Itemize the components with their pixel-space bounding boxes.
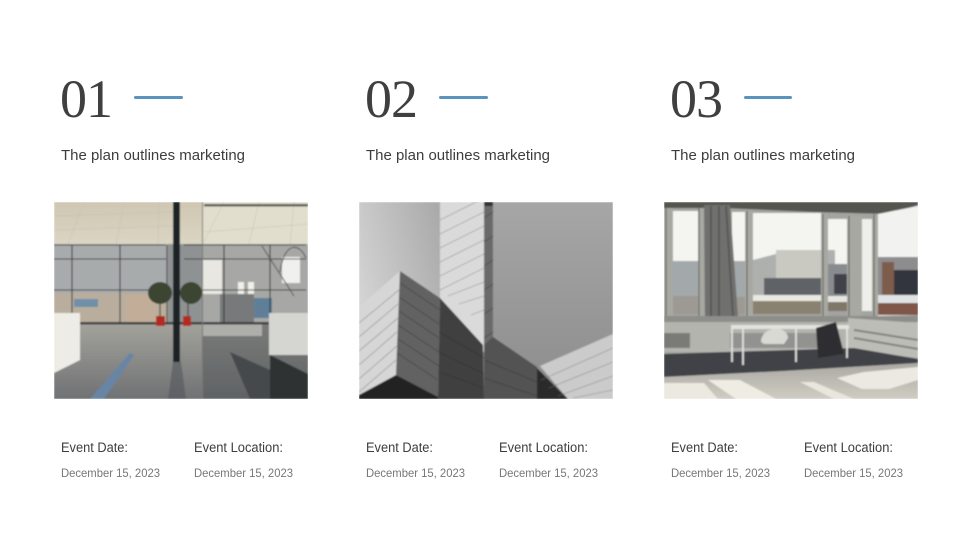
subtitle: The plan outlines marketing	[61, 147, 245, 164]
photo: office interior with glass wall	[54, 202, 308, 399]
event date	[671, 440, 770, 480]
event location	[499, 440, 598, 480]
subtitle: The plan outlines marketing	[671, 147, 855, 164]
event location: December 15, 2023	[804, 466, 903, 480]
number 03: 03	[670, 69, 722, 129]
photo: room with large windows and desk	[664, 202, 918, 399]
accent line	[134, 96, 183, 99]
event date: December 15, 2023	[61, 466, 160, 480]
photo: brick tower architecture	[359, 202, 613, 399]
subtitle: The plan outlines marketing	[366, 147, 550, 164]
accent line	[744, 96, 792, 99]
event location: Event Location:	[194, 440, 283, 455]
number 02: 02	[365, 69, 417, 129]
panel: step 02	[359, 69, 613, 480]
event date	[61, 440, 160, 480]
event location: December 15, 2023	[499, 466, 598, 480]
event date: December 15, 2023	[366, 466, 465, 480]
event location: Event Location:	[804, 440, 893, 455]
event date: Event Date:	[671, 440, 738, 455]
event location	[194, 440, 293, 480]
panel: step 03	[664, 69, 918, 480]
event location	[804, 440, 903, 480]
event location: December 15, 2023	[194, 466, 293, 480]
accent line	[439, 96, 488, 99]
event date: December 15, 2023	[671, 466, 770, 480]
event date: Event Date:	[366, 440, 433, 455]
event date: Event Date:	[61, 440, 128, 455]
number 01: 01	[60, 69, 112, 129]
event location: Event Location:	[499, 440, 588, 455]
event date	[366, 440, 465, 480]
panel: step 01	[54, 69, 308, 480]
